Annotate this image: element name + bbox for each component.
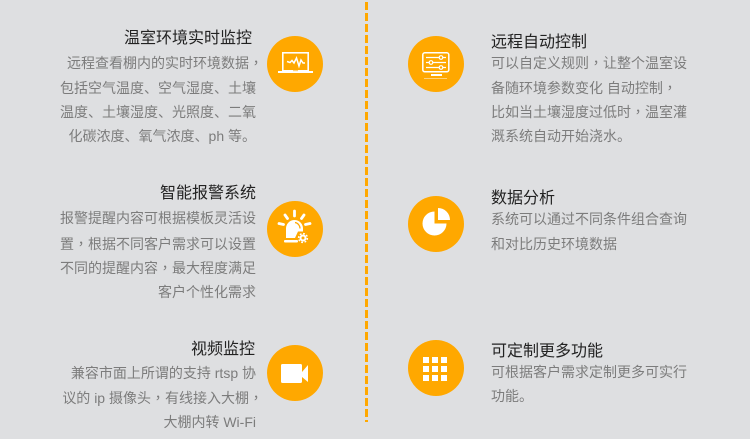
panel: smart alarm system text bbox=[60, 184, 256, 300]
heading: 视频监控 bbox=[191, 341, 255, 358]
heading: 智能报警系统 bbox=[160, 185, 256, 202]
text block: 备随环境参数变化 自动控制， bbox=[491, 78, 677, 98]
panel: greenhouse environment monitoring text bbox=[60, 29, 263, 144]
heading: 远程自动控制 bbox=[491, 34, 587, 51]
text block: 不同的提醒内容，最大程度满足 bbox=[60, 258, 256, 278]
text block: 温度、土壤湿度、光照度、二氧 bbox=[60, 104, 256, 120]
text block: 可根据客户需求定制更多可实行 bbox=[491, 364, 687, 380]
text block: 溉系统自动开始浇水。 bbox=[491, 128, 631, 144]
text block: 比如当土壤湿度过低时，温室灌 bbox=[491, 102, 687, 122]
text block: 议的 ip 摄像头，有线接入大棚， bbox=[62, 388, 263, 408]
text block bbox=[491, 53, 687, 144]
panel: data analysis text bbox=[491, 189, 687, 252]
text block: 化碳浓度、氧气浓度、ph 等。 bbox=[69, 128, 256, 144]
icon: alarm beacon with gear bbox=[267, 201, 323, 257]
text block: 大棚内转 Wi-Fi bbox=[163, 414, 256, 430]
text block: 系统可以通过不同条件组合查询 bbox=[491, 211, 687, 227]
text block: 报警提醒内容可根据模板灵活设 bbox=[60, 210, 256, 226]
text block: 可以自定义规则，让整个温室设 bbox=[491, 53, 687, 73]
icon: pie chart bbox=[408, 196, 464, 252]
text block: 包括空气温度、空气湿度、土壤 bbox=[60, 80, 256, 96]
panel: video monitoring text bbox=[62, 340, 263, 430]
text block: 和对比历史环境数据 bbox=[491, 236, 617, 252]
text block: 远程查看棚内的实时环境数据， bbox=[67, 53, 263, 73]
center dashed divider bbox=[365, 2, 368, 422]
text block bbox=[62, 365, 263, 430]
heading: 温室环境实时监控 bbox=[124, 30, 252, 47]
text block bbox=[491, 211, 687, 252]
icon: control panel with sliders bbox=[408, 36, 464, 92]
icon: nine-square grid bbox=[408, 340, 464, 396]
text block: 置，根据不同客户需求可以设置 bbox=[60, 234, 256, 254]
heading: 数据分析 bbox=[491, 190, 555, 207]
text block: 客户个性化需求 bbox=[158, 284, 256, 300]
text block: 功能。 bbox=[491, 388, 533, 404]
text block bbox=[60, 210, 256, 300]
icon: video camera bbox=[267, 345, 323, 401]
text block bbox=[60, 53, 263, 144]
panel: customizable functions text bbox=[491, 342, 687, 404]
icon: laptop monitor bbox=[267, 36, 323, 92]
heading: 可定制更多功能 bbox=[491, 343, 603, 360]
text block bbox=[491, 364, 687, 404]
text block: 兼容市面上所谓的支持 rtsp 协 bbox=[71, 365, 256, 381]
panel: remote automatic control text bbox=[491, 33, 687, 144]
